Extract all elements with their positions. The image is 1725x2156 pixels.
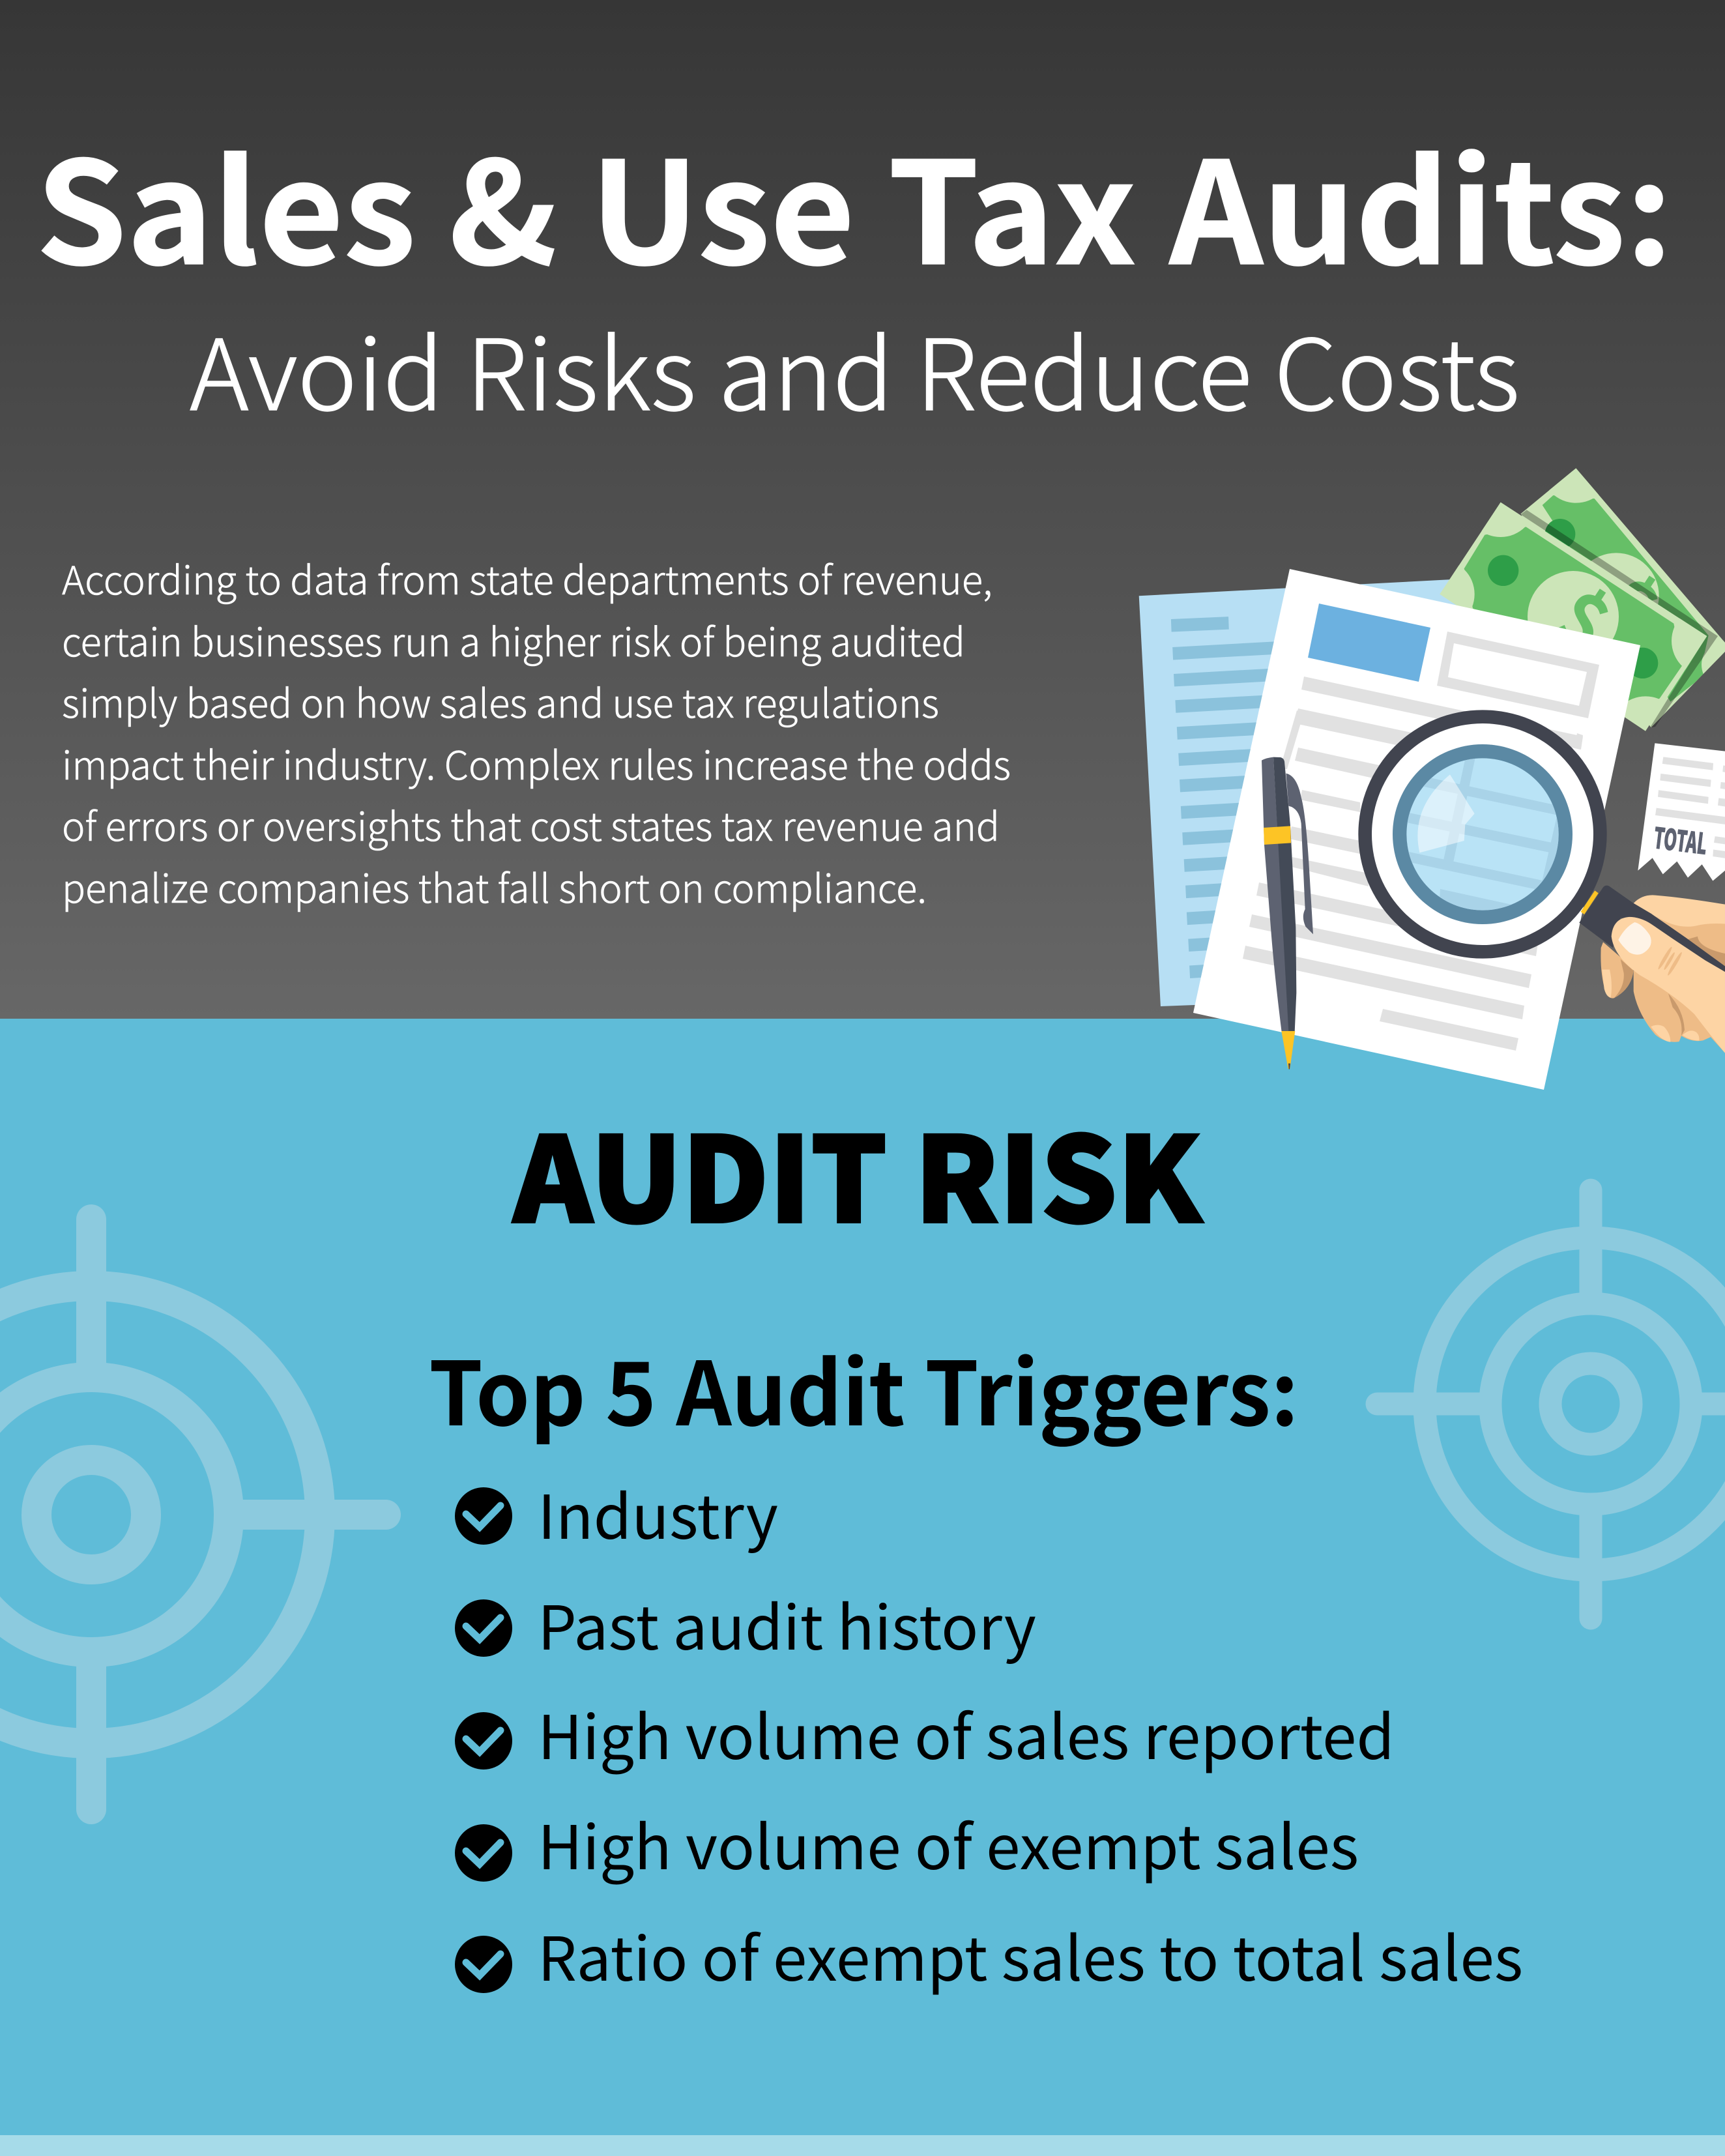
checklist: top five triggers bbox=[455, 1468, 1523, 1998]
intro paragraph bbox=[62, 549, 1011, 914]
item: high volume of sales reported: High volume of sales reported bbox=[538, 1689, 1395, 1777]
title: Sales & Use Tax Audits: bbox=[36, 100, 1673, 305]
illustration: back blue sheet bbox=[1139, 579, 1462, 1006]
intro paragraph: certain businesses run a higher risk of being audited bbox=[62, 611, 965, 668]
top right form box bbox=[1437, 632, 1599, 718]
intro paragraph: of errors or oversights that cost states tax revenue and bbox=[62, 796, 1000, 852]
intro paragraph: simply based on how sales and use tax regulations bbox=[62, 673, 939, 729]
illustration: main white document bbox=[1193, 569, 1640, 1090]
panel: dark header background bbox=[0, 0, 1725, 1019]
magnifier handle bbox=[1579, 886, 1725, 972]
back banknote: $ bbox=[1588, 547, 1683, 660]
lower-left finger bbox=[1601, 942, 1634, 998]
heading: top 5 audit triggers: Top 5 Audit Triggers: bbox=[429, 1323, 1299, 1451]
pen barrel bbox=[1262, 757, 1296, 1032]
icon: left target watermark bbox=[0, 1219, 386, 1809]
pen tip bbox=[1281, 1031, 1295, 1070]
panel: blue audit risk background bbox=[0, 1019, 1725, 2135]
illustration: banknotes bbox=[1440, 468, 1725, 731]
document text lines bbox=[1243, 677, 1583, 1051]
banknote shadow strips bbox=[1520, 510, 1718, 728]
item: high volume of exempt sales: High volume of exempt sales bbox=[538, 1799, 1359, 1887]
item: past audit history: Past audit history bbox=[538, 1579, 1036, 1667]
intro paragraph: impact their industry. Complex rules increase the odds bbox=[62, 735, 1011, 791]
intro paragraph: penalize companies that fall short on compliance. bbox=[62, 858, 927, 914]
illustration: receipt bbox=[1638, 743, 1725, 881]
front banknote bbox=[1440, 502, 1707, 731]
illustration: pen bbox=[1262, 757, 1313, 1070]
blue header block bbox=[1308, 604, 1430, 682]
lower fingers bbox=[1634, 970, 1725, 1053]
icon: right target watermark bbox=[1377, 1190, 1725, 1618]
subtitle: Avoid Risks and Reduce Costs bbox=[190, 297, 1520, 439]
handle collar bbox=[1582, 892, 1597, 913]
pen band bbox=[1264, 826, 1291, 845]
item: ratio of exempt sales to total sales: Ratio of exempt sales to total sales bbox=[538, 1910, 1523, 1998]
panel: light footer strip bbox=[0, 2135, 1725, 2156]
item: industry: Industry bbox=[538, 1468, 778, 1556]
palm above handle bbox=[1634, 895, 1725, 967]
pen clip bbox=[1286, 774, 1313, 934]
illustration: magnifying glass bbox=[1358, 710, 1607, 959]
illustration: hand holding magnifier bbox=[1579, 886, 1725, 1053]
thumb bbox=[1612, 917, 1725, 1053]
dollar sign: $ bbox=[1539, 560, 1634, 673]
intro paragraph: According to data from state departments of revenue, bbox=[62, 549, 993, 606]
back banknote bbox=[1521, 468, 1725, 727]
heading: audit risk: AUDIT RISK bbox=[512, 1086, 1204, 1256]
